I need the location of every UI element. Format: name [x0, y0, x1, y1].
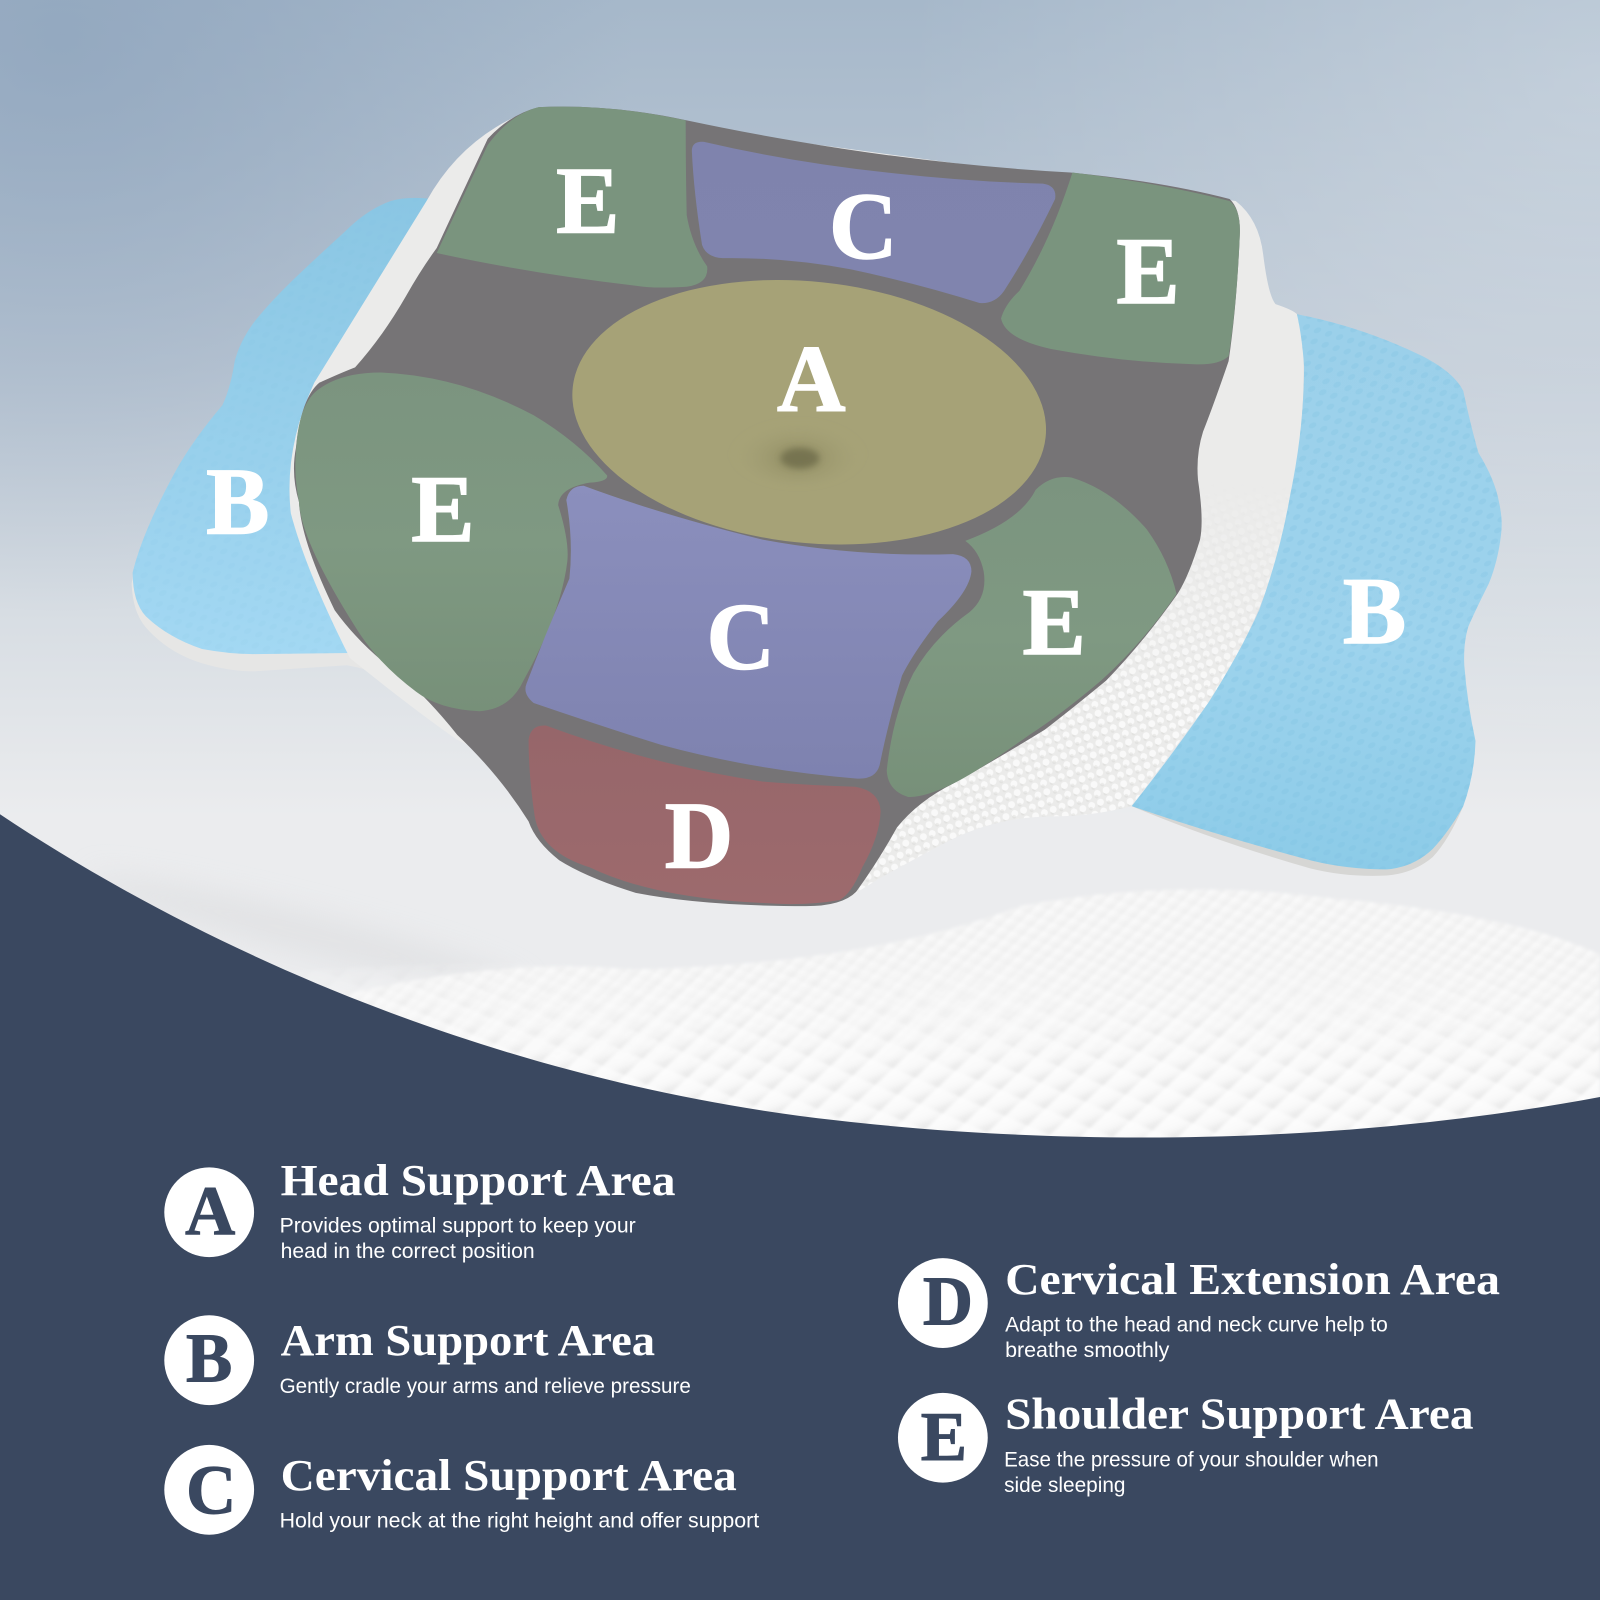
legend item E [898, 1389, 1473, 1497]
legend item A: Provides optimal support to keep your [280, 1214, 636, 1238]
legend item D: Cervical Extension Area [1005, 1254, 1500, 1304]
dark grey pillow top [294, 107, 1240, 906]
zone letters on pillow [206, 148, 1406, 888]
zone letters on pillow: B [206, 449, 269, 555]
zone C top [692, 142, 1055, 303]
legend item C [164, 1445, 759, 1535]
legend item D: D [923, 1263, 973, 1340]
background gradient [0, 0, 1600, 1224]
zone letters on pillow: E [411, 456, 474, 562]
legend item B: Gently cradle your arms and relieve pressure [280, 1374, 691, 1398]
zone letters on pillow: B [1343, 558, 1406, 664]
legend item E: Shoulder Support Area [1005, 1389, 1473, 1439]
zone D [529, 725, 881, 904]
legend item C: Cervical Support Area [281, 1450, 737, 1500]
right arm support wing (B) [1132, 314, 1502, 876]
legend item C: Hold your neck at the right height and offer support [280, 1509, 759, 1533]
zone C bottom [525, 486, 971, 779]
zone letters on pillow: D [665, 782, 733, 888]
legend item B [164, 1315, 691, 1405]
legend item A: A [185, 1174, 235, 1251]
legend item E: Ease the pressure of your shoulder when [1004, 1447, 1379, 1471]
zone letters on pillow: E [1022, 569, 1086, 675]
legend item D: breathe smoothly [1005, 1338, 1170, 1362]
zone E top right [1001, 172, 1240, 364]
legend item D: Adapt to the head and neck curve help to [1005, 1313, 1388, 1337]
legend item E: E [921, 1399, 967, 1476]
zone A head support with dimple [559, 257, 1059, 567]
zone E top left [437, 107, 707, 288]
zone letters on pillow: E [556, 148, 619, 254]
legend item B: Arm Support Area [281, 1315, 655, 1365]
navy curved legend panel [0, 814, 1600, 1600]
left arm support wing (B) [132, 198, 432, 694]
legend item C: C [186, 1452, 236, 1529]
legend item B: B [186, 1321, 232, 1398]
white foam body [289, 107, 1327, 918]
zone letters on pillow: C [707, 583, 775, 689]
zone letters on pillow: C [829, 173, 898, 279]
zone E right [887, 477, 1177, 797]
legend item E: side sleeping [1004, 1473, 1126, 1497]
textured mattress surface [202, 890, 1600, 1138]
legend item A [164, 1155, 676, 1263]
zone letters on pillow: A [777, 326, 845, 432]
pillow illustration [132, 107, 1502, 918]
legend item A: Head Support Area [281, 1155, 676, 1205]
legend item A: head in the correct position [281, 1239, 535, 1263]
legend item D [898, 1254, 1500, 1362]
zone letters on pillow: E [1116, 218, 1180, 324]
zone E left [295, 372, 607, 711]
